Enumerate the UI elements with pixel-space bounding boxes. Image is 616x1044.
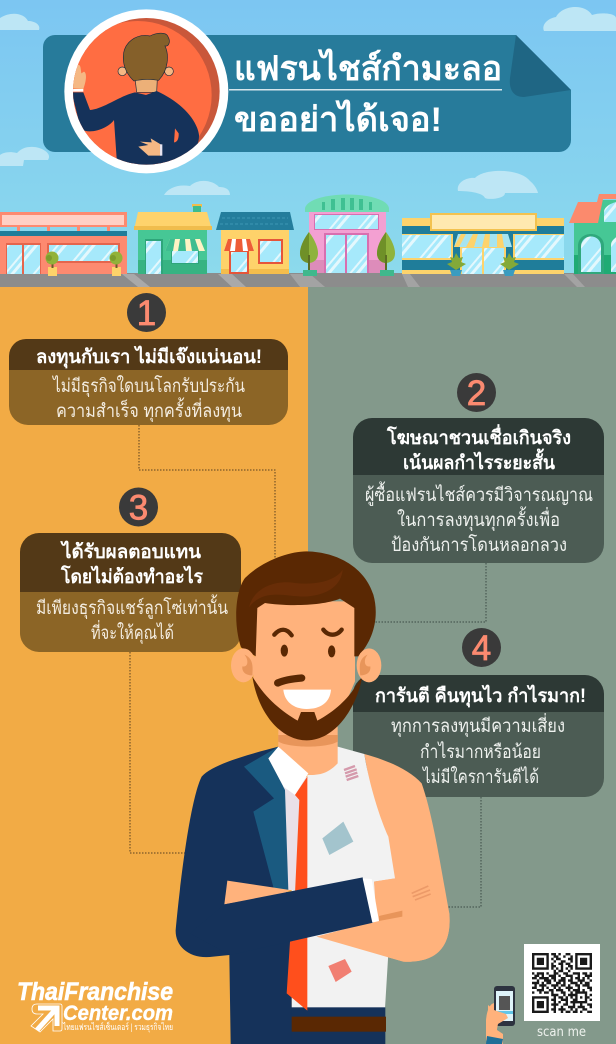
torn shirt <box>292 747 395 1008</box>
callout 4: ทุกการลงทุนมีความเสี่ยง <box>391 713 565 738</box>
collar <box>268 747 308 795</box>
logo: ThaiFranchise Center.com: ThaiFranchise <box>17 978 173 1006</box>
sky background <box>0 0 616 276</box>
callout 4: การันตี คืนทุนไว กำไรมาก! <box>375 684 586 708</box>
phone and hand scanning <box>486 986 515 1044</box>
shirt patches <box>322 766 431 982</box>
logo: ThaiFranchise Center.com <box>17 978 173 1033</box>
callout 1: ลงทุนกับเรา ไม่มีเจ๊งแน่นอน! <box>36 345 262 369</box>
title text: ขออย่าได้เจอ! <box>234 99 442 139</box>
panel: orange left background <box>0 287 308 1044</box>
head of central man <box>231 551 381 740</box>
shirt inner panel <box>283 777 307 890</box>
callout 3: มีเพียงธุรกิจแชร์ลูกโซ่เท่านั้น <box>36 594 228 620</box>
neck <box>278 727 338 775</box>
hair <box>236 551 376 656</box>
shop 6: green with salmon roof <box>569 194 616 274</box>
banner folded corner <box>510 35 571 97</box>
shop 4: pink <box>305 194 389 273</box>
trousers and belt <box>289 1007 386 1044</box>
storefronts row <box>0 194 616 276</box>
dotted connector: box 2 <box>375 563 486 622</box>
logo arrow <box>31 1004 62 1032</box>
number badge 1: 1 <box>137 294 156 333</box>
title text <box>229 48 502 139</box>
number badge 4: 4 <box>472 629 491 668</box>
ears <box>231 648 381 682</box>
shop 3: yellow with teal roof <box>216 212 294 274</box>
dotted connector: box 4 <box>446 797 481 907</box>
right arm and shoulder <box>317 754 450 962</box>
number badge 2 <box>457 373 496 413</box>
crossed suit sleeve <box>224 881 290 904</box>
number badge 3 <box>119 488 158 528</box>
callout 4: ไม่มีใครการันตีได้ <box>421 766 539 787</box>
number badge 2: 2 <box>467 374 486 413</box>
callout 4 <box>353 675 604 797</box>
title banner <box>43 35 571 152</box>
portrait medallion: man seen from behind with crossed fingers <box>64 9 228 173</box>
dotted connector: box 3 <box>130 652 186 853</box>
beard <box>252 676 362 740</box>
lapel <box>244 747 288 893</box>
number badge 4 <box>462 628 501 668</box>
callout 1 <box>9 339 288 425</box>
number badge 3: 3 <box>129 488 148 528</box>
shop 1: salmon <box>0 212 127 276</box>
callout 3 <box>20 533 241 652</box>
QR code <box>524 944 600 1021</box>
callout 2: ป้องกันการโดนหลอกลวง <box>391 534 567 555</box>
suit half <box>176 747 292 1044</box>
panel: grey-green right background <box>308 287 616 1044</box>
callout 2 <box>353 418 604 563</box>
callout 2: เน้นผลกำไรระยะสั้น <box>403 448 555 474</box>
dotted connector: box 1 <box>139 425 275 570</box>
callout 3: ที่จะให้คุณได้ <box>91 620 174 645</box>
callout 3: ได้รับผลตอบแทน <box>60 540 201 563</box>
callout 1: ความสำเร็จ ทุกครั้งที่ลงทุน <box>56 397 242 423</box>
callout 3: โดยไม่ต้องทำอะไร <box>60 565 204 588</box>
banner ribbon <box>43 35 571 152</box>
logo: ThaiFranchise Center.com: ไทยแฟรนไชส์เซ็นเตอร์ | รวมธุรกิจไทย <box>62 1020 173 1033</box>
road <box>0 273 616 287</box>
callout 2: ในการลงทุนทุกครั้งเพื่อ <box>397 506 560 532</box>
tie <box>287 777 307 1011</box>
shop 5: teal and yellow <box>402 213 564 276</box>
face <box>253 601 355 728</box>
number badge 1 <box>127 293 166 333</box>
forearm skin behind sleeve <box>317 878 450 962</box>
trees by shop 4 <box>300 232 395 276</box>
central man: half suit, half torn shirt <box>176 727 450 1044</box>
title text: แฟรนไชส์กำมะลอ <box>234 48 502 88</box>
mustache and smile <box>278 678 302 683</box>
scan me label: scan me <box>537 1025 586 1040</box>
clouds <box>0 7 616 199</box>
callout 2: โฆษณาชวนเชื่อเกินจริง <box>386 424 571 449</box>
shop 2: green <box>134 204 212 274</box>
callout 1: ไม่มีธุรกิจใดบนโลกรับประกัน <box>51 375 245 398</box>
logo: ThaiFranchise Center.com: Center.com <box>63 1002 173 1025</box>
eyes and brows <box>274 630 342 635</box>
callout 4: กำไรมากหรือน้อย <box>420 741 541 762</box>
